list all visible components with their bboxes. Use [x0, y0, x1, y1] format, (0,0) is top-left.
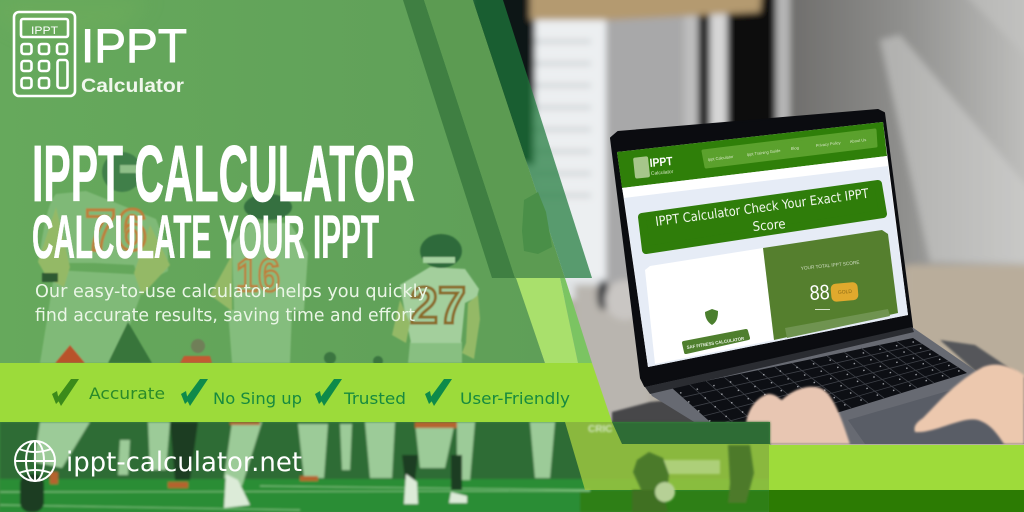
feature: accurate: Accurate [89, 384, 165, 403]
icon: globe [15, 441, 55, 481]
shield icon [705, 309, 718, 325]
sofa and lap fabric [612, 340, 1024, 444]
medium green strip [560, 278, 592, 363]
keyboard [672, 338, 967, 444]
player 76: 76 [85, 198, 147, 263]
right hand [914, 365, 1024, 444]
site header: Blog [791, 145, 799, 151]
score card: YOUR TOTAL IPPT SCORE [801, 260, 860, 272]
icon: calculator [14, 12, 75, 96]
trackpad [848, 386, 1012, 444]
logo on screen [633, 156, 650, 179]
laptop base deck [645, 327, 1024, 444]
logo [14, 12, 187, 97]
site header: Calculator [651, 169, 674, 177]
player 16: 16 [236, 249, 280, 301]
site header [617, 122, 908, 367]
laptop lid [611, 110, 912, 386]
feature: trusted: Trusted [343, 389, 406, 408]
player 27 [324, 234, 480, 366]
photo: room background [470, 0, 1024, 445]
nav pill [703, 130, 876, 167]
white calculator card: SAF FITNESS CALCULATOR [686, 336, 745, 350]
translucent dark band [473, 0, 592, 278]
player 76 [38, 152, 212, 363]
hands [728, 365, 1024, 444]
mid diagonal band [424, 0, 565, 278]
running players legs [34, 422, 555, 486]
screen title pill: Score [752, 217, 786, 235]
title: IPPT CALCULATOR [32, 129, 415, 218]
left hand [728, 387, 850, 444]
feature: no sign up [181, 379, 302, 408]
feature lime bar [0, 363, 612, 422]
site header: IPPT [649, 154, 674, 170]
screen title pill [642, 184, 883, 250]
bottom-left lime overlay strip [565, 422, 770, 490]
logo wordmark: IPPT [81, 19, 187, 72]
site header: Ippt Training Guide [747, 148, 781, 157]
dark diagonal band [403, 0, 515, 278]
score value: 88 [809, 281, 830, 305]
shadow player in band [522, 192, 552, 254]
feature: user-friendly: User-Friendly [460, 389, 570, 408]
site header: Privacy Policy [816, 140, 841, 148]
screen hinge [645, 327, 914, 394]
bottom strip: football photo [0, 422, 770, 512]
strip players and cars [588, 424, 754, 512]
logo: IPPT [31, 25, 58, 37]
description: Our easy-to-use calculator helps you quickly [35, 282, 428, 302]
strip players and cars: CRIC [588, 424, 612, 435]
text: CALCULATE YOUR IPPT [32, 203, 379, 271]
white calculator card [645, 248, 774, 364]
laptop [611, 110, 1024, 444]
player 27: 27 [410, 277, 466, 335]
laptop screen [617, 122, 908, 367]
feature: accurate [52, 379, 165, 406]
logo subtitle: Calculator [81, 76, 185, 97]
player 16 [210, 194, 308, 363]
left green panel with players [0, 0, 592, 366]
feature: trusted [315, 379, 406, 408]
tree [108, 322, 152, 363]
feature: no sign up: No Sing up [213, 389, 302, 408]
site header: Ippt Calculator [708, 154, 734, 162]
referee [191, 339, 205, 353]
description [35, 282, 428, 326]
site header: About Us [850, 137, 866, 144]
gold badge: GOLD [838, 289, 853, 296]
description: find accurate results, saving time and effort [35, 306, 415, 326]
screen title pill: IPPT Calculator Check Your Exact IPPT [655, 187, 870, 230]
lime diagonal strip [516, 278, 578, 363]
bottom-right lime stripe [769, 445, 1024, 490]
feature: user-friendly [425, 379, 570, 408]
website url: ippt-calculator.net [66, 447, 302, 478]
bottom-right dark stripe [769, 490, 1024, 512]
score card [763, 230, 898, 340]
fitness calculator pill [684, 331, 748, 352]
